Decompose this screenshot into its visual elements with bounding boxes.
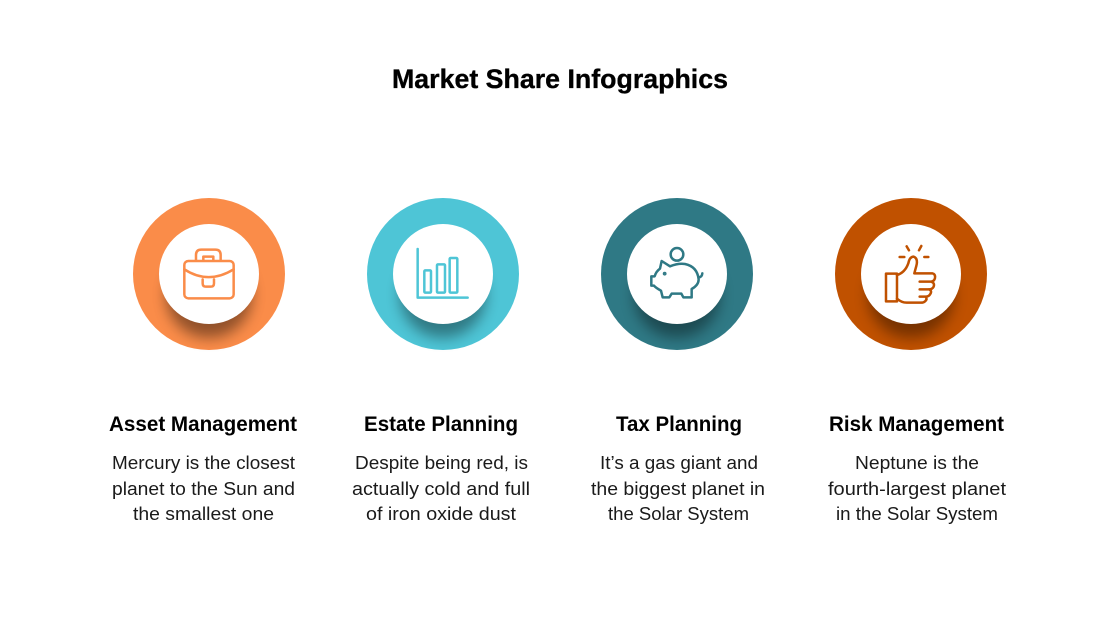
text: tax planning: the Solar System [608, 504, 749, 524]
heading: risk management: Risk Management [829, 413, 1004, 436]
text: asset management [112, 453, 295, 524]
icon: briefcase [184, 250, 234, 298]
text: tax planning [591, 453, 765, 524]
inner shadow [868, 252, 954, 338]
panel: asset management [133, 198, 285, 350]
text: risk management: Neptune is the [855, 453, 979, 473]
heading: tax planning: Tax Planning [616, 413, 742, 436]
heading: asset management: Asset Management [109, 413, 297, 436]
title: Market Share Infographics [392, 64, 728, 94]
icon: piggy bank [651, 248, 702, 297]
white disc [861, 224, 961, 324]
inner shadow [634, 252, 720, 338]
orange ring [133, 198, 285, 350]
heading: estate planning: Estate Planning [364, 413, 518, 436]
text: estate planning [352, 453, 530, 524]
text: asset management: Mercury is the closest [112, 453, 295, 473]
text: estate planning: actually cold and full [352, 479, 530, 499]
text: risk management [828, 453, 1006, 524]
white disc [627, 224, 727, 324]
icon: bar chart [418, 249, 468, 298]
text: tax planning: It’s a gas giant and [600, 453, 758, 473]
text: asset management: planet to the Sun and [112, 479, 295, 499]
white disc [159, 224, 259, 324]
inner shadow [166, 252, 252, 338]
teal ring [367, 198, 519, 350]
dark teal ring [601, 198, 753, 350]
inner shadow [400, 252, 486, 338]
text: risk management: in the Solar System [836, 504, 998, 524]
panel: risk management [835, 198, 987, 350]
text: estate planning: of iron oxide dust [366, 504, 516, 524]
panel: tax planning [601, 198, 753, 350]
text: risk management: fourth-largest planet [828, 479, 1006, 499]
text: estate planning: Despite being red, is [355, 453, 528, 473]
text: asset management: the smallest one [133, 504, 274, 524]
icon: thumbs up [886, 246, 935, 303]
rust ring [835, 198, 987, 350]
panel: estate planning [367, 198, 519, 350]
text: tax planning: the biggest planet in [591, 479, 765, 499]
white disc [393, 224, 493, 324]
